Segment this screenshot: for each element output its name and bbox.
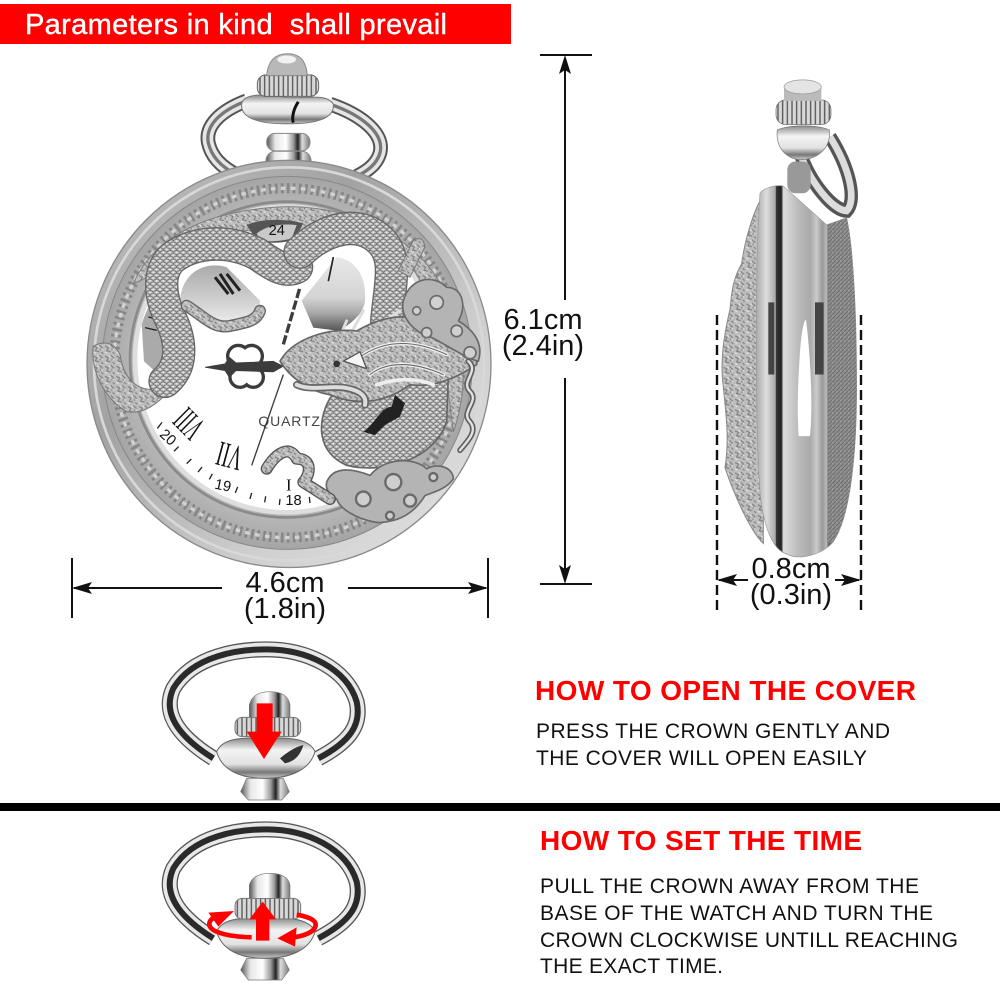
upper clouds — [403, 279, 480, 361]
base stem — [241, 778, 289, 800]
arrows: clockwise rotation — [209, 915, 316, 938]
base stem — [241, 958, 289, 980]
dragon body upper — [162, 244, 297, 381]
dragon — [93, 228, 480, 522]
heading: open cover: HOW TO OPEN THE COVER — [535, 675, 916, 706]
dragon tail flare — [93, 343, 168, 412]
bow ring — [208, 101, 381, 176]
crown illustration: set time — [170, 829, 358, 980]
case profile — [756, 186, 857, 557]
pendant — [217, 738, 315, 778]
text: set time instructions: PULL THE CROWN AWAY FROM THE — [540, 875, 919, 898]
lower cloud spirals — [356, 473, 437, 520]
highlights and dark patches — [768, 302, 824, 374]
pendant — [217, 918, 315, 958]
textured back — [827, 218, 857, 543]
text: set time instructions: THE EXACT TIME. — [540, 955, 723, 978]
height dimension: 6.1cm — [504, 304, 582, 336]
horns — [337, 311, 400, 344]
width dimension: 4.6cm — [246, 567, 324, 599]
right scroll border — [460, 361, 473, 450]
dragon claw upper — [187, 306, 260, 326]
heading: set time: HOW TO SET THE TIME — [540, 825, 862, 856]
stem beads — [266, 133, 311, 171]
clock hands — [205, 287, 300, 465]
text: set time instructions — [540, 875, 958, 978]
section divider bar — [0, 803, 1000, 811]
dial: QUARTZ — [258, 413, 320, 429]
crown — [235, 717, 301, 737]
crown — [235, 898, 301, 919]
ring — [800, 137, 851, 211]
numerals: VII — [212, 434, 247, 479]
silver relief mass over dial — [133, 207, 463, 432]
text: open cover instructions: PRESS THE CROWN GENTLY AND — [536, 720, 890, 743]
front view of pocket watch — [87, 54, 491, 568]
thickness dimension: (0.3in) — [750, 579, 832, 611]
date window — [247, 220, 303, 243]
dark opening in body — [363, 395, 405, 435]
dragon lower body — [321, 368, 448, 468]
dragon head and mane — [280, 317, 477, 401]
cloud spirals — [413, 296, 476, 359]
side view of pocket watch — [722, 80, 857, 557]
thickness dimension: 0.8cm — [752, 553, 830, 585]
dial openings — [142, 257, 365, 373]
text: set time instructions: CROWN CLOCKWISE UNTILL REACHING — [540, 929, 958, 952]
cap — [249, 692, 290, 717]
text: open cover instructions: THE COVER WILL OPEN EASILY — [536, 747, 867, 770]
numerals: VIII — [165, 400, 212, 448]
numerals: 20 — [156, 426, 179, 449]
chrome bow — [170, 829, 358, 938]
title banner: Parameters in kind shall prevail — [25, 9, 447, 41]
dragon lower claw — [267, 451, 330, 499]
width dimension: (1.8in) — [244, 593, 326, 625]
date window: 24 — [269, 223, 285, 239]
lower clouds — [326, 461, 453, 522]
numerals: 19 — [213, 477, 232, 496]
watch case — [87, 160, 491, 568]
height dimension: (2.4in) — [502, 330, 584, 362]
ornament relief — [722, 195, 763, 543]
numerals: 18 — [285, 493, 302, 509]
text: set time instructions: BASE OF THE WATCH AND TURN THE — [540, 902, 933, 925]
arrow: pull up — [249, 902, 276, 941]
numerals: I — [286, 476, 292, 495]
thickness dimension — [717, 315, 861, 615]
text: open cover instructions — [536, 720, 890, 770]
tick marks — [157, 422, 310, 505]
arrow: press down — [247, 703, 282, 759]
crown and stem — [776, 80, 831, 193]
crown pendant — [242, 54, 333, 124]
height dimension — [502, 55, 592, 584]
chrome bow — [170, 649, 358, 758]
width dimension — [72, 558, 488, 625]
numerals — [156, 400, 302, 509]
title banner — [0, 4, 511, 44]
dial — [130, 202, 443, 517]
crown illustration: press — [170, 649, 358, 800]
cap — [249, 873, 290, 898]
